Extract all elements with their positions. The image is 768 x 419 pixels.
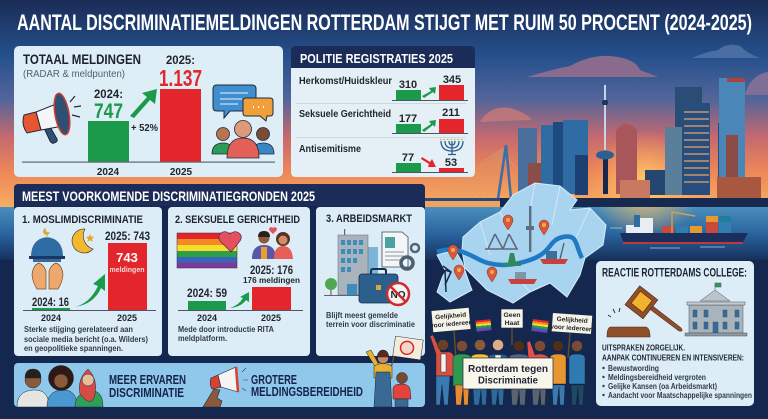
icon: gavel	[607, 286, 682, 337]
glass towers	[665, 78, 745, 195]
bar chart: totaal: 2025:	[166, 53, 195, 67]
text: moslim note: sociale media bericht (o.a. Wilders)	[24, 334, 148, 344]
arrow: up	[130, 89, 157, 118]
subheading: (RADAR & meldpunten)	[23, 69, 125, 80]
text: seksuele gerichtheid note: meldplatform.	[178, 333, 227, 343]
river	[437, 237, 582, 265]
row: antisemitisme: 53	[445, 157, 457, 169]
row: herkomst: 345	[443, 74, 461, 86]
text: grotere meldingsbereidheid	[251, 372, 363, 399]
Euromast	[596, 85, 614, 194]
icon: statue	[438, 266, 451, 292]
icon: euromast	[526, 206, 534, 252]
icon: woman and child with sign	[366, 336, 423, 407]
Erasmus bridge	[425, 145, 536, 207]
icon: megaphone	[23, 92, 81, 143]
banner: rotterdam tegen discriminatie	[463, 358, 553, 389]
map of Rotterdam region	[437, 183, 606, 303]
text: meer ervaren	[109, 372, 186, 400]
bar chart: totaal	[22, 53, 275, 178]
rainbow flags	[476, 319, 549, 333]
icon: menorah	[440, 140, 464, 154]
towers left of the Euromast	[518, 120, 588, 195]
sign: gelijkheid links: Gelijkheid	[435, 312, 466, 321]
panel: politie registraties	[291, 46, 475, 177]
card: moslimdiscriminatie	[14, 207, 162, 356]
bar chart: moslim: meldingen	[109, 267, 145, 274]
row: seksuele gerichtheid: Seksuele Gerichtheid	[299, 109, 391, 120]
bar chart: moslim: 2024: 16	[32, 297, 69, 309]
bar chart: totaal: + 52%	[131, 123, 158, 134]
sign: geen haat: Geen	[504, 312, 520, 319]
text: meer ervaren: MEER ERVAREN	[109, 372, 186, 387]
icon: rainbow flag with heart	[177, 232, 241, 268]
text: moslim note	[24, 324, 148, 353]
banner: meer ervaren en grotere meldingsbereidheid	[14, 336, 425, 407]
panel: meest voorkomende discriminatiegronden	[14, 184, 425, 362]
bar chart: seksuele gerichtheid: 176 meldingen	[243, 275, 300, 285]
skyline of Rotterdam	[425, 78, 768, 207]
text: moslim note: en geopolitieke spanningen.	[24, 343, 123, 353]
clouds	[480, 45, 768, 122]
card: moslimdiscriminatie: 1. MOSLIMDISCRIMINATIE	[22, 214, 143, 226]
heading: totaal meldingen: TOTAAL MELDINGEN	[23, 51, 141, 67]
map pins	[448, 215, 549, 282]
row: antisemitisme: 77	[402, 152, 414, 164]
row: seksuele gerichtheid	[299, 107, 468, 134]
heading: politie registraties	[291, 46, 475, 68]
arrow: seksuele gerichtheid up	[230, 292, 249, 308]
text: seksuele gerichtheid note: Mede door introductie RITA	[178, 324, 274, 334]
bar chart: totaal: 2025	[170, 167, 193, 178]
banner: rotterdam tegen discriminatie: Rotterdam tegen	[468, 363, 548, 375]
sign: geen haat	[501, 309, 523, 345]
icon: prohibition sign	[387, 283, 409, 305]
brick low-rise	[717, 177, 761, 201]
icon: people	[212, 120, 274, 158]
list: maatregelen: Meldingsbereidheid vergroten	[608, 372, 706, 382]
bar chart: totaal: 747	[94, 100, 123, 123]
row: antisemitisme: Antisemitisme	[299, 144, 361, 155]
heading: meest voorkomende	[14, 184, 425, 206]
panel: totaal meldingen	[14, 46, 283, 178]
row: herkomst	[299, 74, 468, 101]
card: arbeidsmarkt	[316, 207, 425, 356]
list: maatregelen	[602, 363, 752, 400]
bar chart: totaal: 2024:	[94, 87, 123, 101]
card: arbeidsmarkt: 3. ARBEIDSMARKT	[326, 213, 412, 225]
icon: megaphone with hand	[203, 367, 248, 407]
banner: rotterdam tegen discriminatie: Discriminatie	[478, 374, 538, 386]
icon: office building	[324, 229, 378, 296]
heading: politie registraties: POLITIE REGISTRATIES 2025	[300, 52, 453, 66]
text: uitspraken: UITSPRAKEN ZORGELIJK.	[602, 342, 685, 352]
icon: three people	[17, 366, 103, 407]
icon: lighthouse	[503, 253, 521, 266]
bar chart: moslim	[23, 231, 156, 323]
row: herkomst: 310	[399, 79, 417, 91]
icon: couple	[252, 227, 293, 259]
text: arbeidsmarkt note: terrein voor discriminatie	[326, 319, 415, 329]
icon: briefcase	[359, 269, 398, 303]
bar chart: moslim: 2025	[117, 313, 137, 323]
sign: gelijkheid rechts: voor iedereen	[550, 324, 593, 333]
people	[430, 335, 585, 405]
list: maatregelen: Bewustwording	[608, 363, 659, 373]
bar chart: moslim: 743	[116, 250, 138, 265]
row: seksuele gerichtheid: 177	[399, 113, 417, 125]
text: meer ervaren: DISCRIMINATIE	[109, 385, 184, 400]
text: seksuele gerichtheid note	[178, 324, 274, 343]
card: seksuele gerichtheid	[168, 207, 310, 356]
arrow: moslim up	[75, 274, 105, 307]
rose-coloured tower	[616, 124, 637, 194]
bar chart: seksuele gerichtheid	[178, 265, 303, 323]
text: arbeidsmarkt note: Blijft meest gemelde	[326, 310, 398, 320]
bar chart: seksuele gerichtheid: 2024	[197, 313, 217, 323]
bar chart: seksuele gerichtheid: 2025	[261, 313, 281, 323]
icon: resume with gears	[382, 232, 419, 269]
icon: speech bubbles	[213, 85, 273, 121]
sign: gelijkheid links: voor iedereen	[430, 319, 473, 330]
text: arbeidsmarkt note	[326, 310, 415, 329]
bar chart: seksuele gerichtheid: 2024: 59	[187, 288, 227, 300]
sign: gelijkheid links	[429, 307, 473, 360]
bar chart: moslim: 2025: 743	[105, 231, 150, 243]
bar chart: totaal: 2024	[97, 167, 120, 178]
text: grotere meldingsbereidheid: MELDINGSBEREIDHEID	[251, 384, 363, 399]
sign: geen haat: Haat	[505, 320, 520, 327]
icon: praying hands	[32, 263, 63, 289]
heading: meest voorkomende: MEEST VOORKOMENDE DISCRIMINATIEGRONDEN 2025	[22, 188, 315, 204]
row: seksuele gerichtheid: 211	[442, 107, 460, 119]
icon: city hall	[685, 283, 747, 336]
bar chart: seksuele gerichtheid: 2025: 176	[250, 265, 293, 277]
list: maatregelen: Gelijke Kansen (oa Arbeidsmarkt)	[608, 381, 717, 391]
icon: prohibition sign: NO	[390, 290, 406, 301]
protest group	[429, 307, 594, 405]
sign: gelijkheid rechts	[550, 313, 594, 358]
sign: gelijkheid rechts: Gelijkheid	[556, 316, 588, 325]
icon: mosque	[29, 228, 65, 262]
container ship	[610, 212, 748, 248]
card: seksuele gerichtheid: 2. SEKSUELE GERICHTHEID	[175, 214, 300, 226]
text: moslim note: Sterke stijging gerelateerd aan	[24, 324, 133, 334]
icon: map ship two	[540, 243, 568, 264]
bar chart: moslim: 2024	[41, 313, 61, 323]
row: herkomst: Herkomst/Huidskleur	[299, 76, 392, 87]
bar chart: totaal: 1.137	[159, 65, 202, 91]
row: antisemitisme	[299, 140, 468, 173]
icon: crescent and star	[72, 229, 94, 253]
panel: reactie rotterdams college	[596, 261, 754, 406]
icon: map ship one	[508, 272, 537, 284]
text: grotere meldingsbereidheid: GROTERE	[251, 372, 297, 387]
icon: bridge	[485, 234, 518, 249]
text: uitspraken	[602, 342, 744, 362]
